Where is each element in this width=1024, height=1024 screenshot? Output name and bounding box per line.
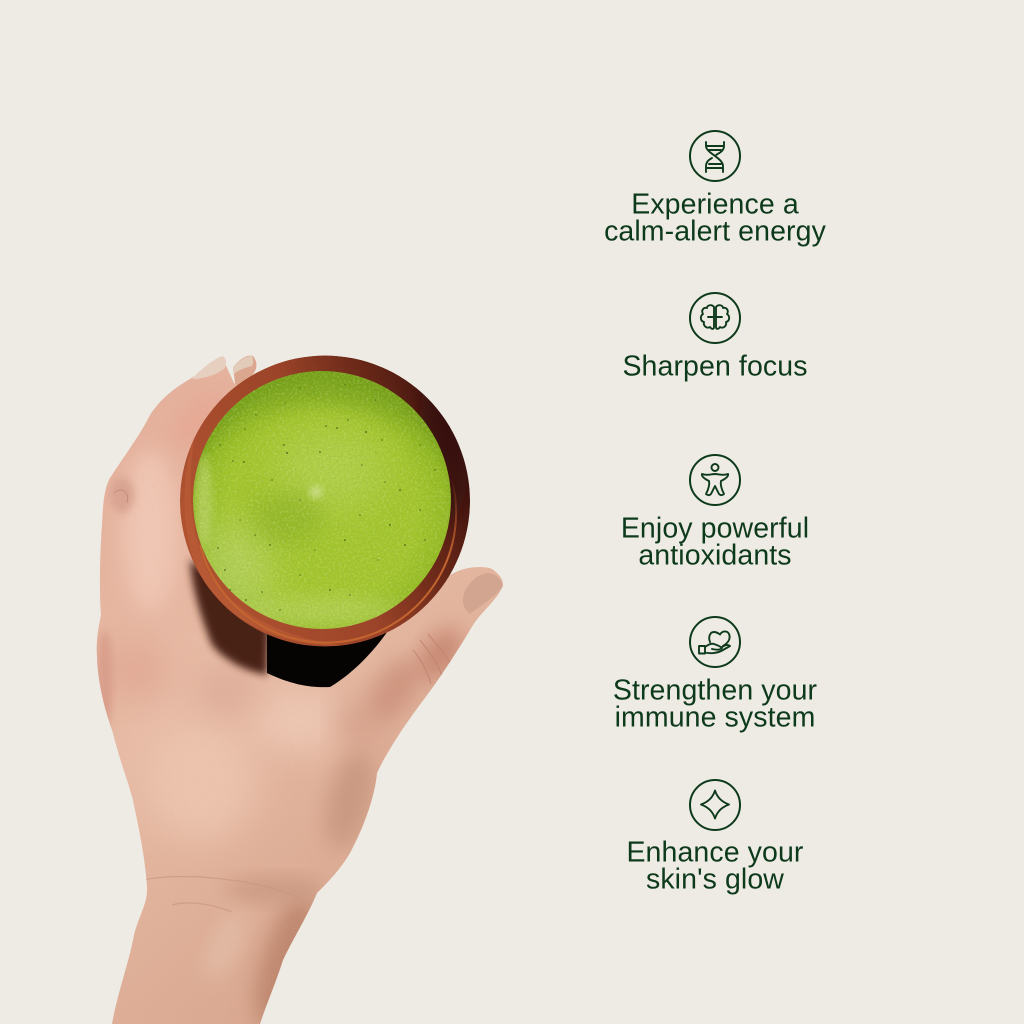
label: skin's glow (646, 864, 784, 896)
icon: DNA helix (690, 131, 740, 181)
terracotta cup (180, 355, 471, 646)
label: Sharpen focus (622, 350, 808, 382)
icon: sparkle star (690, 780, 740, 830)
icon: brain (690, 293, 740, 343)
benefit: calm-alert energy (604, 131, 827, 248)
label: antioxidants (638, 540, 792, 572)
benefit: antioxidants (621, 455, 809, 572)
label: Enhance your (626, 836, 804, 868)
icon: hand holding heart (690, 617, 740, 667)
benefit: focus (622, 293, 808, 382)
speckles (217, 384, 436, 611)
label: immune system (615, 702, 815, 734)
shadow under cup (190, 560, 392, 687)
label: Strengthen your (613, 674, 818, 706)
label: Experience a (631, 188, 799, 220)
label: calm-alert energy (604, 216, 827, 248)
benefit: skin glow (626, 780, 804, 896)
fingernail: thumb (463, 573, 502, 614)
icon: human figure (690, 455, 740, 505)
benefit: immune system (613, 617, 818, 734)
matcha surface (193, 351, 451, 629)
fingernail: index (192, 356, 226, 379)
label: Enjoy powerful (621, 512, 809, 544)
hand (95, 355, 505, 1024)
photo: hand holding a cup of matcha (95, 351, 505, 1024)
